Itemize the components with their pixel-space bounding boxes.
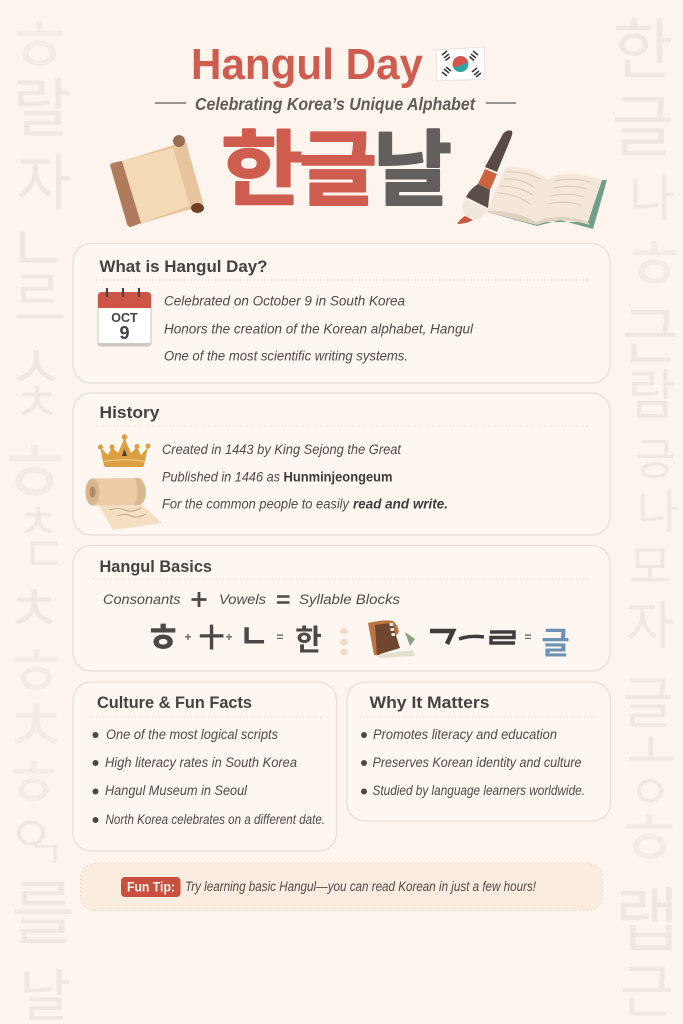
left column of faded Hangul characters: ㅊ [5,559,63,649]
formula: consonants plus vowels equals syllable blocks [103,592,400,607]
icon: calendar: 9 [119,323,130,343]
left column of faded Hangul characters: ㄴ [8,196,68,292]
right column of faded Hangul characters: ㅎ [614,778,683,888]
example: building the syllable 한 [145,606,322,664]
left column of faded Hangul characters: ㅡ [13,272,67,356]
right column of faded Hangul characters: 자 [626,584,674,659]
text: history facts [162,442,448,512]
right column of faded Hangul characters: 모 [629,531,671,597]
left column of faded Hangul characters: ㅎ [4,616,68,717]
callout: Fun Tip [80,864,602,910]
example: building the syllable 한: = [276,630,284,644]
bullet list: why it matters [361,727,585,798]
icon: calendar: OCT [111,311,138,325]
bullet list: culture facts: One of the most logical scripts [106,727,278,742]
Korean heading: 한 [221,125,303,216]
example: building the syllable 한: + [225,630,233,644]
bullet list: culture facts: North Korea celebrates on a different date. [106,812,325,827]
panel: What is Hangul Day? [73,244,610,383]
left column of faded Hangul characters: ㅇ [8,795,54,867]
Korean heading [221,125,452,216]
left column of faded Hangul characters: ㄱ [29,824,63,879]
heading: What is Hangul Day?: What is Hangul Day? [100,257,268,276]
badge: Fun Tip label: Fun Tip: [127,880,175,894]
text: what is Hangul Day [164,294,474,364]
decorative separator dots [340,628,348,656]
example: building the syllable 한: + [184,630,192,644]
left column of faded Hangul characters: ㅅ [7,317,65,407]
left column of faded Hangul characters: ㅊ [16,483,60,553]
right column of faded Hangul characters: 나 [637,476,679,542]
formula: consonants plus vowels equals syllable blocks: Consonants [103,592,181,607]
left column of faded Hangul characters: ㅊ [13,361,61,436]
right column of faded Hangul characters [612,0,683,1024]
example: building the syllable 한: 十 [198,618,225,655]
badge: Fun Tip label [121,877,180,897]
panel: Hangul Basics [73,546,610,671]
right column of faded Hangul characters: 나 [629,159,675,231]
left column of faded Hangul characters: ㅊ [3,668,69,773]
right column of faded Hangul characters: 긍 [635,423,675,487]
icon: brown book [368,620,415,658]
bullet list: culture facts [92,727,325,827]
left column of faded Hangul characters: ㅎ [2,728,64,827]
Korean heading: 글 [299,125,377,216]
text: history facts: Published in 1446 as [162,470,280,484]
left column of faded Hangul characters: ㄷ [22,515,66,585]
title: Hangul Day [191,40,424,89]
bullet list: culture facts: High literacy rates in South Korea [105,755,297,770]
icon: crown [98,434,150,467]
panel: History [73,393,610,535]
bullet list: why it matters: Studied by language learners worldwide. [372,783,585,798]
text: history facts: read and write. [353,496,448,512]
bullet list: culture facts: Hangul Museum in Seoul [105,783,248,798]
example: building the syllable 글 [430,618,570,663]
bullet list: why it matters: Preserves Korean identity and culture [372,755,582,770]
bullet list: why it matters: Promotes literacy and education [373,727,557,742]
panel: Why It Matters [347,682,610,821]
example: building the syllable 한: ㄴ [239,610,269,658]
right column of faded Hangul characters: 람 [627,351,677,430]
text: history facts: Created in 1443 by King Sejong the Great [162,442,402,457]
right column of faded Hangul characters: ㅗ [626,708,676,787]
icon: brush and open book [457,130,607,229]
formula: consonants plus vowels equals syllable blocks: Vowels [219,592,266,607]
left column of faded Hangul characters [0,0,75,1024]
left column of faded Hangul characters: 랄 [13,58,71,150]
Korean heading: 날 [373,125,452,216]
right column of faded Hangul characters: ㅇ [629,756,671,822]
heading: History: History [100,403,160,422]
heading: Why It Matters: Why It Matters [370,693,490,712]
formula: consonants plus vowels equals syllable blocks: Syllable Blocks [299,592,400,607]
example: building the syllable 글: 글 [541,618,570,663]
heading: Culture & Fun Facts: Culture & Fun Facts [97,693,252,712]
heading: Hangul Basics: Hangul Basics [100,557,212,576]
left column of faded Hangul characters: ㄹ [11,246,63,327]
panel: Culture and Fun Facts [73,682,336,851]
icon: Hunminjeongeum scroll [86,478,162,530]
left column of faded Hangul characters: 를 [11,858,75,959]
text: tip message: Try learning basic Hangul—you can read Korean in just a few hours! [185,879,536,894]
text: history facts: Hunminjeongeum [284,470,392,484]
subtitle: Celebrating Korea’s Unique Alphabet [195,94,476,114]
icon: calendar [98,288,151,346]
right column of faded Hangul characters: 글 [622,659,674,740]
icon: Korean flag [436,47,485,81]
text: what is Hangul Day: Celebrated on October 9 in South Korea [164,294,405,308]
text: what is Hangul Day: One of the most scientific writing systems. [164,348,408,364]
example: building the syllable 한: ㅎ [145,606,181,664]
example: building the syllable 한: 한 [295,617,322,659]
example: building the syllable 글: = [524,630,532,644]
right column of faded Hangul characters: 랩 [615,865,679,966]
right column of faded Hangul characters: 글 [612,72,674,171]
icon: scroll [110,135,204,227]
right column of faded Hangul characters: 근 [621,286,679,376]
text: what is Hangul Day: Honors the creation of the Korean alphabet, Hangul [164,322,474,336]
left column of faded Hangul characters: 자 [16,135,72,222]
text: history facts: For the common people to easily [162,496,350,512]
